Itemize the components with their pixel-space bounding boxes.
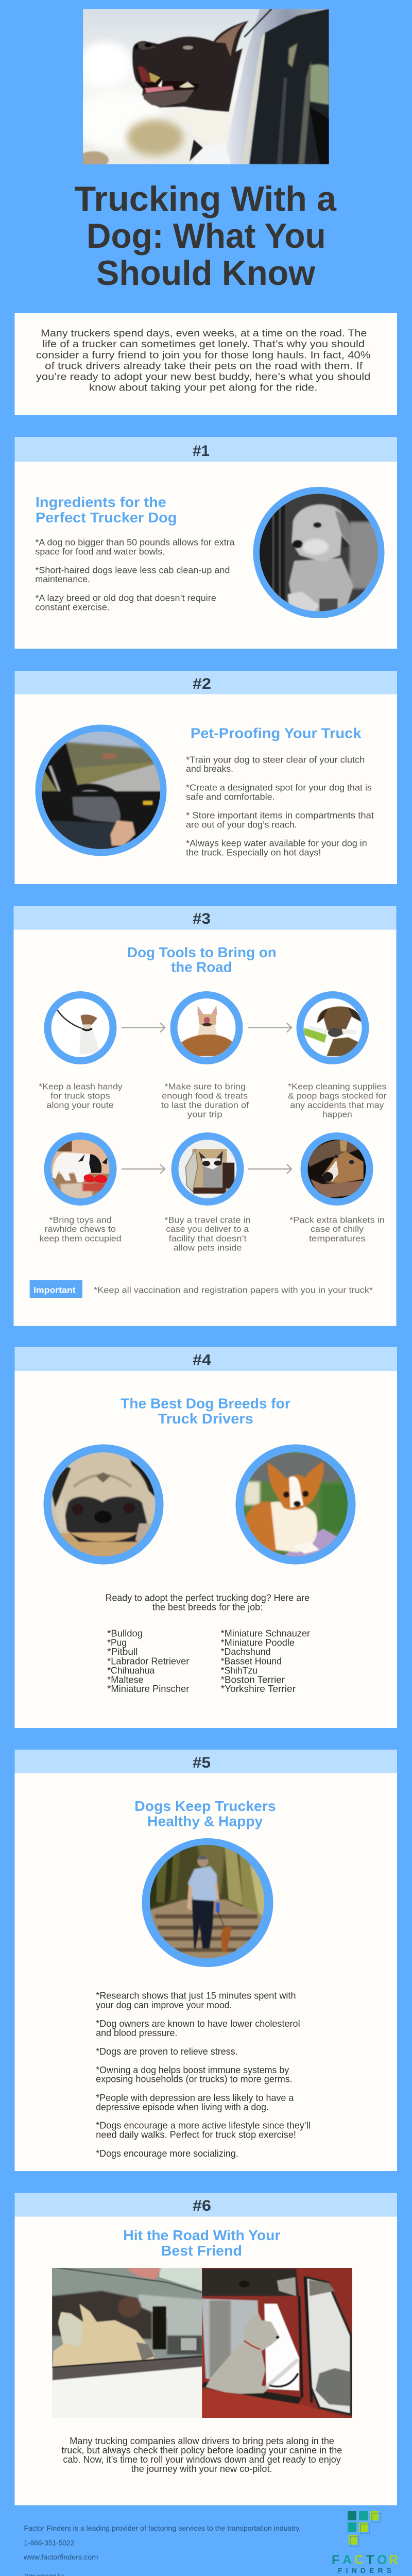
photo: truck cab view with steering wheel (35, 724, 167, 856)
section 5 heading: Dogs Keep Truckers (134, 1798, 276, 1814)
health benefit text: exposing households (or trucks) to more germs. (96, 2074, 293, 2084)
section 1 bullet text: *Short-haired dogs leave less cab clean-up and (35, 565, 230, 575)
health benefit text: *Owning a dog helps boost immune systems by (96, 2065, 289, 2075)
breed list column 1: *Chihuahua (107, 1665, 155, 1675)
breed list column 2: *Miniature Poodle (221, 1637, 295, 1648)
breed list column 1: *Miniature Pinscher (107, 1684, 189, 1694)
section 6 header band: #6 (193, 2197, 211, 2214)
arrow (248, 1164, 291, 1174)
adoption intro text: Ready to adopt the perfect trucking dog? Here are (106, 1593, 310, 1603)
photo: sleeping dog in car window (52, 2267, 203, 2419)
tool captions row 1 (39, 1082, 387, 1119)
section 2 bullet text: safe and comfortable. (186, 791, 275, 802)
intro text: you’re ready to adopt your new best buddy, here’s what you should (36, 371, 370, 383)
health benefit text: *Dogs are proven to relieve stress. (96, 2046, 238, 2057)
breed list column 2: *Miniature Schnauzer (221, 1628, 310, 1638)
tool captions row 1: any accidents that may (290, 1100, 384, 1110)
logo: Factor Finders: R (389, 2553, 398, 2567)
section 2 bullet text: *Create a designated spot for your dog that is (186, 782, 372, 792)
hero photo: dog leaning out of car window (73, 9, 329, 168)
panel: section 4 (14, 1347, 397, 1728)
tool: leash photo (44, 991, 116, 1064)
tool captions row 1: to last the duration of (161, 1100, 249, 1110)
section 2 bullet text: are out of your dog’s reach. (186, 820, 297, 830)
intro text: Many truckers spend days, even weeks, at a time on the road. The (41, 328, 367, 339)
adoption intro text: the best breeds for the job: (152, 1602, 263, 1613)
breed list column 2: *Basset Hound (221, 1656, 282, 1667)
panel: section 5 (14, 1750, 397, 2171)
section 5 heading (134, 1798, 276, 1829)
breed list column 2: *Boston Terrier (221, 1674, 285, 1685)
section 2 heading: Pet-Proofing Your Truck (191, 725, 362, 741)
section 1 heading: Perfect Trucker Dog (36, 510, 177, 526)
arrow (122, 1023, 165, 1032)
section 1 bullet text: *A lazy breed or old dog that doesn’t require (35, 592, 216, 603)
breed list column 1: *Labrador Retriever (107, 1656, 189, 1667)
health benefit text: your dog can improve your mood. (96, 2000, 232, 2010)
closing text: the journey with your new co-pilot. (131, 2463, 272, 2474)
section 3 heading: the Road (171, 959, 232, 975)
tool captions row 2: case of chilly (311, 1224, 364, 1234)
tool captions row 1: *Keep cleaning supplies (288, 1082, 386, 1091)
section 2 bullet text: * Store important items in compartments that (186, 810, 374, 821)
title: Trucking With a (74, 179, 337, 218)
panel: intro (14, 313, 397, 415)
breed list column 1 (107, 1628, 189, 1694)
section 3 header band (13, 906, 397, 929)
section 5 header band: #5 (193, 1754, 211, 1771)
section 4 heading (121, 1396, 290, 1427)
section 6 heading: Hit the Road With Your (123, 2227, 280, 2243)
footer company info: Factor Finders is a leading provider of factoring services to the transportation industry. (24, 2524, 301, 2532)
section 4 heading: Truck Drivers (158, 1411, 253, 1427)
title: Should Know (96, 253, 316, 293)
section 1 heading: Ingredients for the (36, 494, 166, 510)
tool captions row 2: rawhide chews to (45, 1224, 116, 1234)
tool captions row 1: enough food & treats (162, 1091, 248, 1100)
section 5 heading: Healthy & Happy (147, 1814, 263, 1829)
tool: blanket photo (301, 1132, 373, 1206)
health benefit text: *People with depression are less likely to have a (96, 2093, 294, 2103)
intro text: know about taking your pet along for the ride. (89, 382, 317, 393)
health benefit text: depressive episode when living with a dog. (96, 2102, 269, 2112)
tool: crate photo (171, 1132, 244, 1206)
important badge (30, 1280, 82, 1298)
section 1 bullet text: space for food and water bowls. (35, 547, 165, 557)
logo: Factor Finders: FINDERS (338, 2566, 391, 2574)
health benefit text: and blood pressure. (96, 2028, 177, 2038)
title (74, 179, 337, 293)
closing text: truck, but always check their policy before loading your canine in the (61, 2445, 342, 2455)
section 4 header band (14, 1347, 397, 1371)
section 4 header band: #4 (193, 1352, 211, 1368)
photo: chihuahua (236, 1445, 355, 1564)
photo: pug (43, 1445, 164, 1564)
section 6 header band (14, 2193, 397, 2216)
footer company info: 1-866-351-5022 (24, 2539, 75, 2547)
footer company info: www.factorfinders.com (23, 2553, 98, 2561)
arrow (122, 1164, 165, 1174)
tool captions row 2: temperatures (309, 1233, 366, 1244)
important badge: Important (33, 1285, 76, 1295)
tool captions row 2: case you deliver to a (166, 1224, 249, 1234)
section 1 bullet text: *A dog no bigger than 50 pounds allows for extra (35, 537, 235, 548)
closing text: Many trucking companies allow drivers to bring pets along in the (70, 2435, 334, 2446)
footer company info (23, 2524, 301, 2561)
tool captions row 1: happen (322, 1109, 352, 1119)
section 1 heading (36, 494, 177, 526)
section 1 header band: #1 (193, 443, 210, 460)
intro text: consider a furry friend to join you for those long hauls. In fact, 40% (36, 349, 370, 361)
tool captions row 1: *Make sure to bring (164, 1082, 246, 1091)
panel: section 6 (14, 2193, 397, 2505)
logo: Factor Finders: C (354, 2553, 364, 2567)
tool: toy photo (44, 1132, 116, 1206)
section 2 bullet text: the truck. Especially on hot days! (186, 847, 321, 857)
health benefit text: *Dogs encourage a more active lifestyle since they’ll (96, 2121, 311, 2131)
tool captions row 1: for truck stops (50, 1091, 110, 1100)
photo: terrier at truck wheel (202, 2267, 354, 2419)
breed list column 2: *ShihTzu (221, 1665, 258, 1675)
breed list column 1: *Pug (107, 1637, 127, 1648)
section 3 heading (127, 944, 277, 975)
logo: Factor Finders: F (332, 2553, 339, 2567)
arrow (248, 1023, 291, 1032)
title: Dog: What You (87, 216, 326, 256)
section 1 bullet text (35, 537, 235, 612)
section 3 header band: #3 (193, 910, 211, 927)
closing text (61, 2435, 342, 2474)
section 6 heading: Best Friend (161, 2243, 242, 2259)
tool captions row 2: *Pack extra blankets in (289, 1215, 385, 1225)
section 4 heading: The Best Dog Breeds for (121, 1396, 290, 1412)
tool captions row 2: keep them occupied (39, 1233, 122, 1244)
section 2 header band (14, 671, 397, 694)
tool: food photo (170, 991, 243, 1064)
logo: Factor Finders: A (342, 2553, 352, 2567)
tool captions row 1: your trip (187, 1109, 222, 1119)
section 2 bullet text (186, 754, 374, 857)
breed list column 2: *Yorkshire Terrier (221, 1684, 296, 1694)
health benefit text: *Dogs encourage more socializing. (96, 2148, 238, 2159)
health benefit text: *Dog owners are known to have lower cholesterol (96, 2019, 300, 2029)
section 2 bullet text: *Always keep water available for your dog in (186, 838, 367, 848)
panel: section 3 (13, 906, 397, 1326)
closing text: cab. Now, it’s time to roll your windows down and get ready to enjoy (63, 2454, 341, 2465)
breed list column 1: *Pitbull (107, 1647, 138, 1657)
tool captions row 1: *Keep a leash handy (39, 1082, 123, 1091)
section 2 header band: #2 (193, 675, 211, 692)
section 1 bullet text: maintenance. (35, 574, 90, 584)
photo: man walking dog in forest (142, 1838, 273, 1967)
logo: Factor Finders: T (366, 2553, 374, 2567)
section 2 bullet text: *Train your dog to steer clear of your clutch (186, 754, 365, 765)
health benefit text (96, 1991, 311, 2159)
tool captions row 1: along your route (46, 1100, 114, 1110)
logo: Factor Finders (332, 2511, 398, 2574)
intro text: of truck drivers already take their pets on the road with them. If (45, 361, 363, 372)
breed list column 2 (221, 1628, 310, 1694)
tool captions row 2: allow pets inside (174, 1243, 242, 1252)
intro text (36, 328, 370, 393)
panel: section 1 (14, 437, 397, 649)
section 1 bullet text: constant exercise. (35, 602, 110, 612)
health benefit text: *Research shows that just 15 minutes spent with (96, 1991, 296, 2001)
tool: brush photo (297, 991, 369, 1064)
adoption intro text (106, 1593, 310, 1613)
tool captions row 2: *Bring toys and (49, 1215, 112, 1225)
breed list column 2: *Dachshund (221, 1647, 271, 1657)
intro text: life of a trucker can sometimes get lonely. That’s why you should (42, 338, 365, 350)
important note: *Keep all vaccination and registration papers with you in your truck* (94, 1285, 373, 1295)
section 2 bullet text: and breaks. (186, 764, 233, 774)
health benefit text: need daily walks. Perfect for truck stop exercise! (96, 2130, 296, 2140)
tool captions row 2: facility that doesn’t (169, 1233, 247, 1244)
breed list column 1: *Bulldog (107, 1628, 143, 1638)
section 1 header band (14, 437, 397, 462)
tool captions row 2: *Buy a travel crate in (164, 1215, 251, 1225)
panel: section 2 (14, 671, 397, 884)
logo: Factor Finders: O (377, 2553, 387, 2567)
section 6 heading (123, 2227, 280, 2259)
photo: grayscale dog (253, 487, 384, 618)
breed list column 1: *Maltese (107, 1674, 144, 1685)
tool captions row 2 (39, 1215, 385, 1252)
section 5 header band (14, 1750, 397, 1773)
section 3 heading: Dog Tools to Bring on (127, 944, 277, 960)
tool captions row 1: & poop bags stocked for (288, 1091, 387, 1100)
